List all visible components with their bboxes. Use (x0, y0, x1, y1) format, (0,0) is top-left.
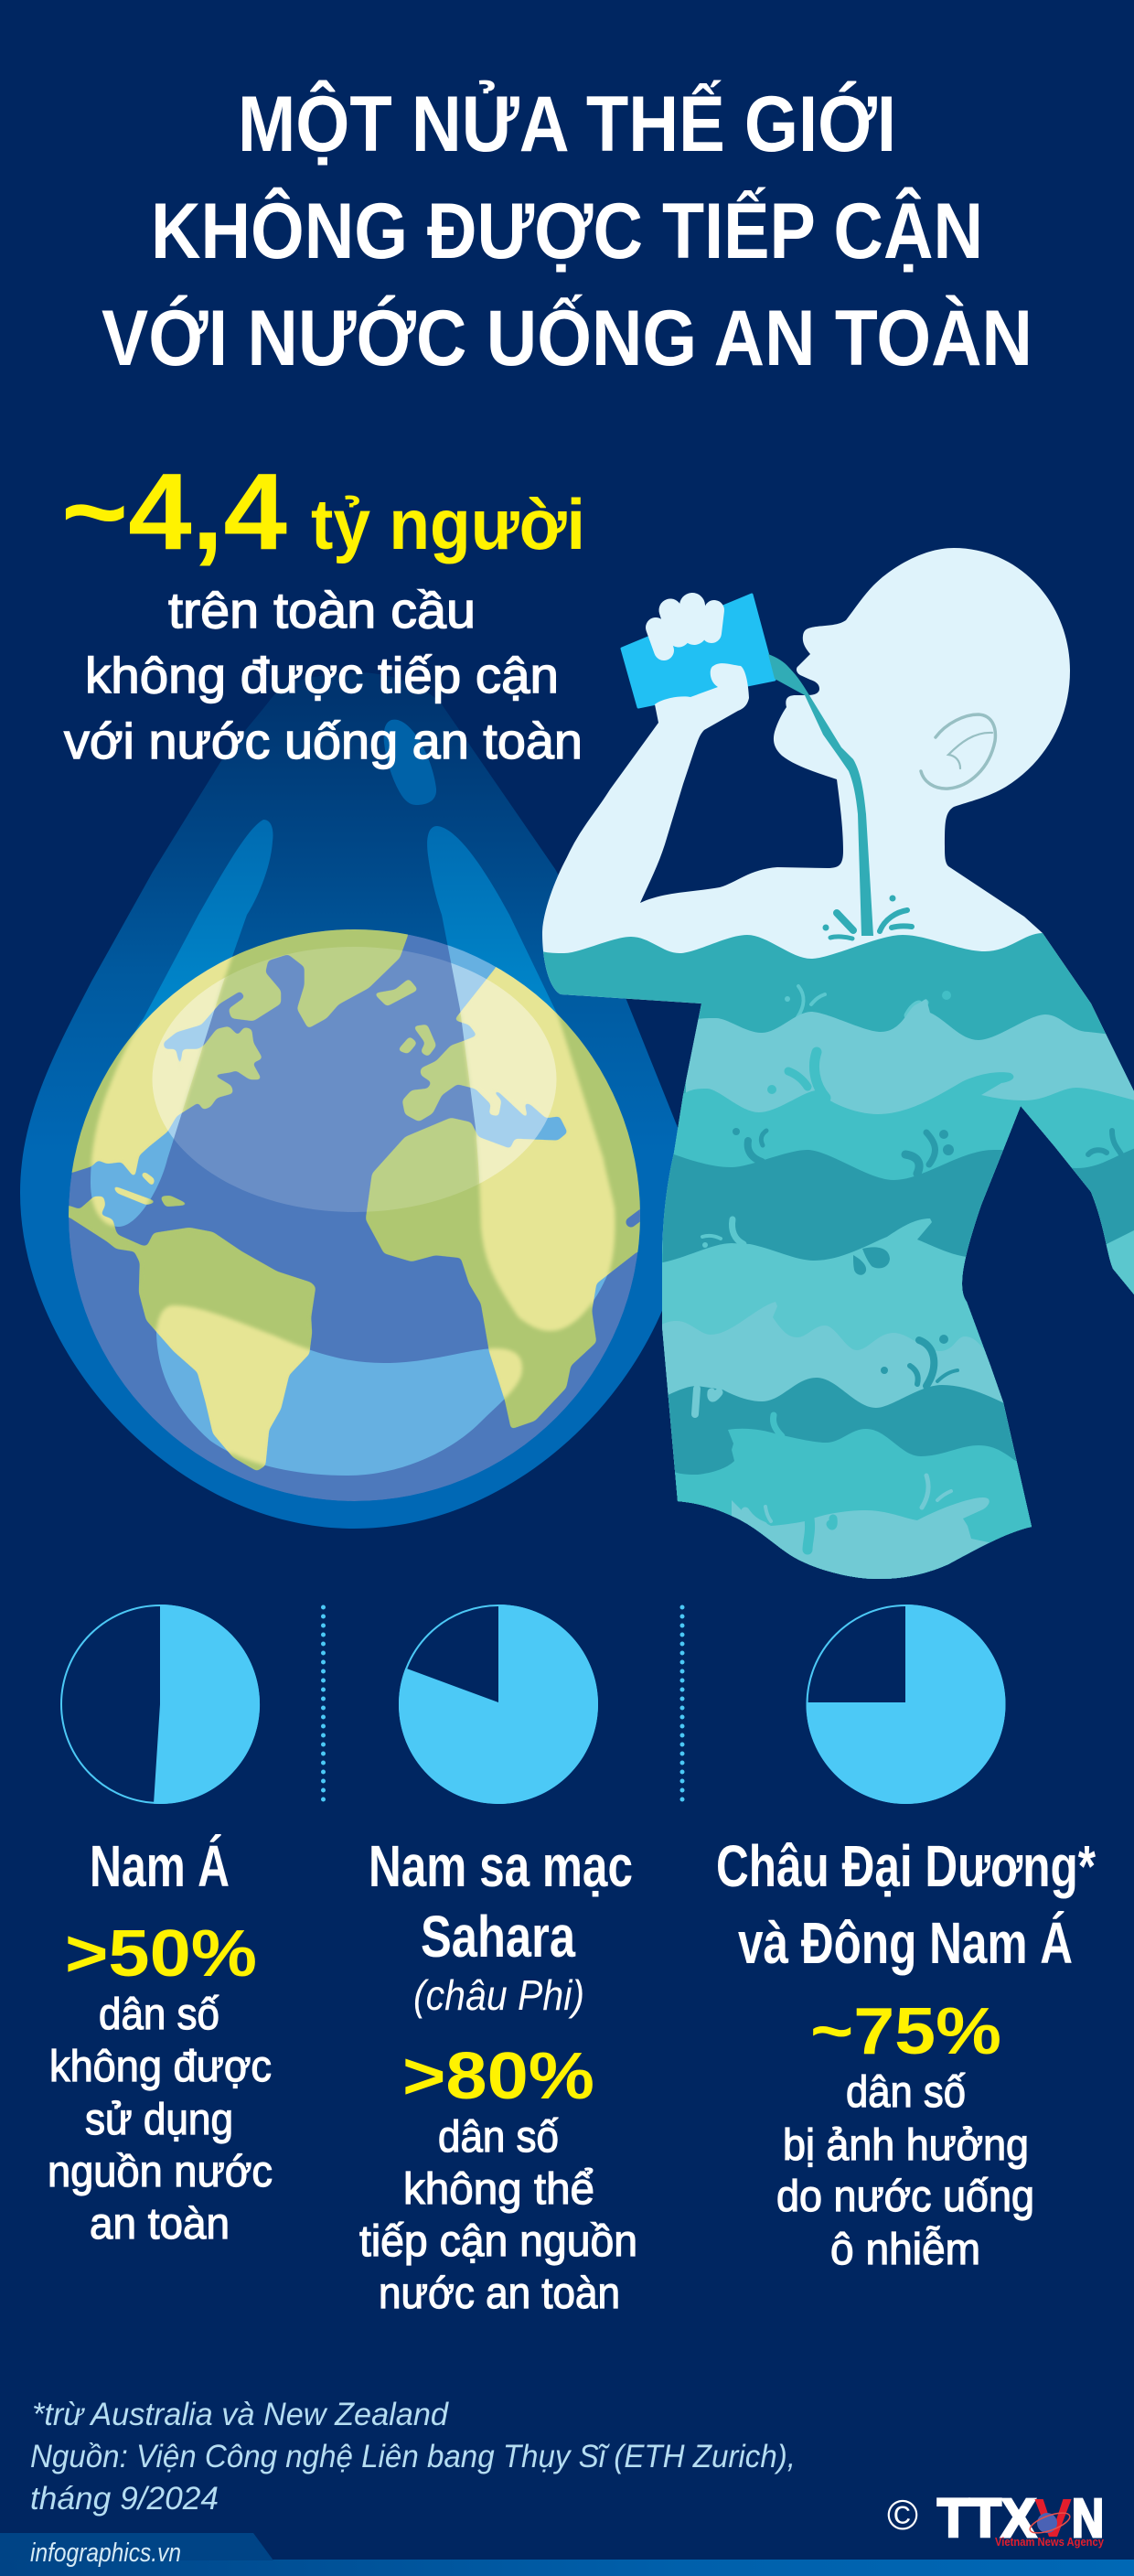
description: nguồn nước (48, 2148, 273, 2196)
description: ô nhiễm (830, 2225, 980, 2274)
description (64, 582, 583, 769)
description: không được (49, 2043, 272, 2091)
key statistic: 4.4 billion people (61, 451, 585, 769)
silhouette (542, 548, 1134, 1579)
description (359, 2113, 637, 2318)
illustration: water drop with globe (20, 672, 688, 1529)
description: dân số (846, 2068, 966, 2117)
heading: Nam sa mạc (369, 1833, 633, 1899)
footnote and source (30, 2397, 796, 2517)
chest splash drops (823, 895, 896, 931)
description: dân số (438, 2113, 559, 2162)
pie chart: over 80 percent (399, 1605, 598, 1804)
subheading: (châu Phi) (413, 1971, 584, 2019)
pie chart: over 50 percent (61, 1605, 260, 1804)
description: không được tiếp cận (85, 647, 559, 703)
title: MỘT NỬA THẾ GIỚI (238, 80, 896, 168)
big number: ~4,4 (61, 451, 287, 573)
description: tiếp cận nguồn (359, 2217, 637, 2266)
continents with reflections (69, 929, 640, 1471)
footer tab (0, 2533, 273, 2560)
drop highlight: right streak (427, 826, 615, 1331)
logo: TTXVN: Vietnam News Agency (995, 2535, 1105, 2549)
heading (716, 1833, 1096, 1976)
column: Nam Á (48, 1605, 273, 2249)
unit: tỷ người (311, 484, 585, 564)
heading: Sahara (421, 1904, 575, 1970)
drop highlight: small top (384, 720, 436, 805)
globe (69, 929, 640, 1501)
copyright symbol: © (887, 2491, 918, 2538)
column: Nam sa mạc Sahara (359, 1605, 637, 2318)
percentage: >50% (65, 1917, 257, 1991)
water drop outline (20, 672, 688, 1529)
water stream through neck (768, 654, 873, 936)
percentage: ~75% (810, 1995, 1001, 2068)
logo: TTXVN (937, 2488, 1105, 2549)
pie chart: about 75 percent (806, 1605, 1005, 1804)
illustration: person drinking water (521, 548, 1134, 1601)
logo: TTXVN: V (1034, 2488, 1072, 2549)
globe top glare (152, 947, 556, 1212)
column: Châu Đại Dương và Đông Nam Á (716, 1605, 1096, 2274)
percentage: >80% (402, 2040, 594, 2113)
title (102, 80, 1032, 382)
island gulf (631, 1214, 642, 1222)
description (776, 2068, 1034, 2274)
water layers (521, 915, 1134, 1601)
logo: TTXVN: TTX (937, 2488, 1036, 2549)
ocean (69, 929, 640, 1501)
divider (680, 1607, 684, 1808)
footer bar (0, 2560, 1134, 2576)
globe light reflections on ocean (91, 945, 607, 1476)
description: sử dụng (85, 2096, 233, 2144)
description: không thể (403, 2165, 594, 2214)
glare over streaks (152, 962, 556, 1184)
heading (369, 1833, 633, 1970)
fingers (656, 606, 714, 650)
drop highlight: left streak (91, 820, 273, 1227)
description: với nước uống an toàn (64, 713, 583, 769)
description: do nước uống (776, 2173, 1034, 2221)
description: trên toàn cầu (168, 582, 476, 639)
description: nước an toàn (379, 2270, 620, 2318)
title: VỚI NƯỚC UỐNG AN TOÀN (102, 295, 1032, 382)
description (48, 1991, 273, 2249)
footnote and source: Nguồn: Viện Công nghệ Liên bang Thụy Sĩ (ETH Zurich), (30, 2439, 796, 2474)
heading: Nam Á (90, 1833, 230, 1899)
website: infographics.vn (30, 2538, 181, 2568)
description: an toàn (90, 2200, 230, 2249)
cup (622, 595, 775, 707)
chest splashes (830, 910, 912, 939)
ear (921, 714, 995, 789)
description: bị ảnh hưởng (783, 2121, 1029, 2170)
logo: TTXVN: N (1072, 2488, 1104, 2549)
title: KHÔNG ĐƯỢC TIẾP CẬN (151, 188, 983, 275)
description: dân số (99, 1991, 219, 2039)
divider (321, 1607, 326, 1808)
footnote and source: tháng 9/2024 (30, 2481, 219, 2517)
footnote and source: *trừ Australia và New Zealand (32, 2397, 449, 2432)
